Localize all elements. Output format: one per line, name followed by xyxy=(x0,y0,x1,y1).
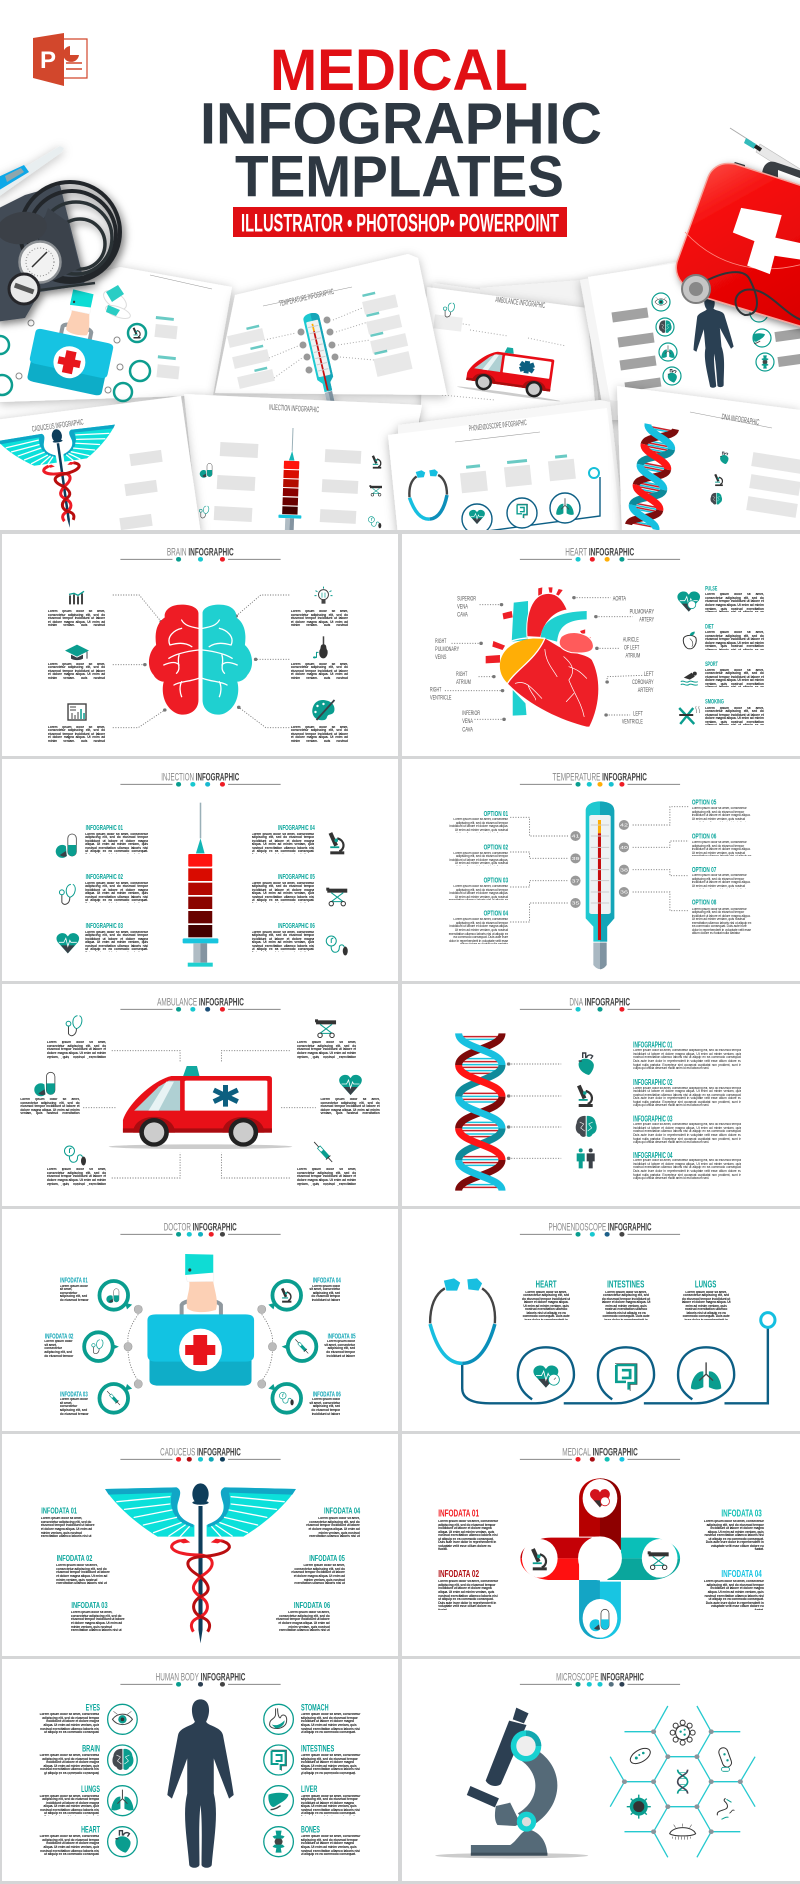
infographic headings xyxy=(85,824,314,930)
icon: stethoscope xyxy=(91,1340,103,1354)
organ headings: LIVER xyxy=(301,1784,317,1794)
temperature markers: 37 xyxy=(572,879,580,884)
icon: worms xyxy=(717,1798,734,1819)
heart labels: LEFT xyxy=(633,710,643,717)
sheet: ambulance infographic xyxy=(420,287,596,424)
icon: stretcher xyxy=(648,1551,669,1570)
heart labels: RIGHT xyxy=(430,686,441,693)
infodata headings: INFODATA 02 xyxy=(56,1554,92,1563)
section headings xyxy=(536,1278,717,1290)
heart labels: VENA xyxy=(462,718,473,725)
panel: microscope infographic xyxy=(402,1659,800,1881)
list headings: DIET xyxy=(705,623,714,630)
sheet: ambulance infographic: AMBULANCE INFOGRAPHIC xyxy=(495,295,546,310)
sheet: ambulance back pages xyxy=(430,280,600,420)
panel: brain infographic xyxy=(2,534,398,756)
sheet: injection infographic: INJECTION INFOGRAPHIC xyxy=(269,403,319,414)
icon: palette xyxy=(312,700,334,720)
temperature markers: 35 xyxy=(572,902,580,906)
infodata headings: INFODATA 02 xyxy=(44,1332,73,1340)
banner xyxy=(233,207,567,238)
section headings: HEART xyxy=(536,1278,557,1290)
icon: pill xyxy=(590,1609,609,1631)
panel: temperature infographic: OPTION 05 xyxy=(692,798,717,807)
icon: dark virus xyxy=(627,1795,651,1819)
temperature markers: 42 xyxy=(620,824,629,828)
icon: stomach xyxy=(269,1708,286,1729)
title: MEDICAL xyxy=(270,38,528,103)
organ headings xyxy=(81,1703,334,1835)
icon: PowerPoint logo: P xyxy=(40,47,56,74)
icon: heart pulse xyxy=(339,1075,361,1095)
option headings: OPTION 02 xyxy=(484,843,508,852)
sheet: injection infographic xyxy=(184,394,422,535)
icon: microscope xyxy=(280,1288,291,1303)
icon: heart organ xyxy=(115,1831,130,1853)
panel: heart infographic xyxy=(402,534,800,756)
dotted connectors xyxy=(83,1051,315,1178)
infodata headings: INFODATA 06 xyxy=(293,1601,330,1610)
icon: red first aid case xyxy=(676,162,800,335)
panel: temperature infographic: OPTION 08 xyxy=(692,898,717,907)
heading: caduceus xyxy=(120,1446,280,1462)
icon: heart with gauge xyxy=(590,1489,610,1507)
icon: liver xyxy=(268,1793,288,1810)
icon: digital thermometer xyxy=(0,146,64,200)
icon: heart pulse xyxy=(56,933,79,953)
icon: pulse heart xyxy=(677,592,700,612)
infodata headings: INFODATA 05 xyxy=(309,1554,344,1563)
panel: phonendoscope infographic xyxy=(402,1209,800,1431)
organ headings: HEART xyxy=(81,1825,99,1835)
option headings: OPTION 03 xyxy=(484,876,508,885)
heading: medical xyxy=(520,1446,680,1462)
heart labels: VENTRICLE xyxy=(622,718,643,725)
sheet: caduceus infographic xyxy=(0,396,201,536)
icon: apple xyxy=(683,632,696,649)
icon: bones xyxy=(272,1831,284,1853)
option headings: OPTION 01 xyxy=(484,810,508,818)
icon: small DNA xyxy=(678,1770,688,1794)
infodata headings: INFODATA 03 xyxy=(71,1601,107,1610)
heart labels: RIGHT xyxy=(456,671,467,678)
icon: brain xyxy=(576,1116,597,1137)
heading: DNA: DNA INFOGRAPHIC xyxy=(569,996,630,1009)
infodata headings: INFODATA 02 xyxy=(438,1568,479,1579)
panel: phonendoscope infographic: LUNGS xyxy=(695,1278,717,1290)
heart labels: RIGHT xyxy=(435,638,446,645)
temperature markers: 41 xyxy=(572,835,580,839)
temperature markers xyxy=(570,820,629,908)
icon: pill xyxy=(34,1072,54,1096)
heart labels: INFERIOR xyxy=(462,710,480,717)
heart labels: CAVA xyxy=(457,611,468,618)
heading: caduceus: CADUCEUS INFOGRAPHIC xyxy=(160,1446,240,1459)
heart labels: VENTRICLE xyxy=(430,694,452,701)
panel: human body infographic: INTESTINES xyxy=(301,1744,334,1754)
infodata headings: INFODATA 03 xyxy=(60,1390,87,1398)
infodata headings xyxy=(44,1276,355,1398)
temperature markers: 38 xyxy=(620,868,629,873)
organ headings: LUNGS xyxy=(81,1784,100,1794)
icon: heart with gauge xyxy=(533,1365,559,1388)
panel: doctor infographic xyxy=(2,1209,398,1431)
infodata headings: INFODATA 04 xyxy=(312,1276,340,1284)
caduceus illustration xyxy=(105,1483,295,1643)
icon: bacteria left xyxy=(628,1745,653,1767)
icon: no smoking xyxy=(679,706,700,724)
infodata headings: INFODATA 01 xyxy=(60,1276,87,1284)
stethoscope illustration xyxy=(430,1278,495,1363)
heading: temperature: TEMPERATURE INFOGRAPHIC xyxy=(553,771,647,784)
organ rings xyxy=(107,1704,293,1857)
panel: human body infographic xyxy=(2,1659,398,1881)
title: TEMPLATES xyxy=(235,144,564,210)
tube and rings xyxy=(462,1313,775,1403)
infographic headings: INFOGRAPHIC 01 xyxy=(85,824,122,832)
infodata headings: INFODATA 01 xyxy=(438,1507,479,1519)
icon: brain xyxy=(112,1749,133,1770)
panel: heart infographic: ARTERY xyxy=(638,687,654,694)
panel: injection infographic xyxy=(2,759,398,981)
panel: doctor infographic: INFODATA 05 xyxy=(327,1332,355,1340)
temperature markers: 39 xyxy=(572,857,580,862)
icon: caterpillar xyxy=(670,1824,696,1840)
panel: DNA infographic xyxy=(402,984,800,1206)
teal bubbles xyxy=(84,1281,316,1413)
infographic headings xyxy=(633,1041,673,1160)
list headings: SPORT xyxy=(705,661,718,668)
panel: heart infographic: ARTERY xyxy=(639,616,654,623)
heading: phonendoscope xyxy=(520,1221,680,1237)
heading: ambulance: AMBULANCE INFOGRAPHIC xyxy=(157,996,244,1009)
dotted connectors xyxy=(445,596,643,721)
heading: DNA xyxy=(520,996,680,1012)
section headings: INTESTINES xyxy=(607,1278,645,1290)
list headings: PULSE xyxy=(705,585,718,592)
heading: brain xyxy=(120,546,280,562)
icon: light bulb xyxy=(314,587,332,604)
heart labels: ATRIUM xyxy=(456,679,471,686)
sheet: DNA infographic xyxy=(617,386,800,535)
panel: heart infographic: CORONARY xyxy=(632,679,654,686)
icon: pill xyxy=(55,834,76,858)
panel: caduceus infographic xyxy=(2,1434,398,1656)
panel: injection infographic: INFOGRAPHIC 04 xyxy=(278,824,314,832)
panel: human body infographic: STOMACH xyxy=(301,1703,328,1713)
panel: ambulance infographic xyxy=(2,984,398,1206)
organ headings: BRAIN xyxy=(82,1744,99,1754)
heading: human body xyxy=(120,1671,280,1687)
thermometer illustration xyxy=(586,801,614,969)
heart labels: ATRIUM xyxy=(625,652,640,659)
dotted connectors xyxy=(510,807,689,922)
panel: DNA infographic: INFOGRAPHIC 04 xyxy=(633,1152,673,1160)
heading: human body: HUMAN BODY INFOGRAPHIC xyxy=(155,1671,245,1684)
heading: ambulance xyxy=(120,996,280,1012)
heading: heart xyxy=(520,546,680,562)
banner: ILLUSTRATOR • PHOTOSHOP• POWERPOINT xyxy=(241,210,559,238)
organ headings: BONES xyxy=(301,1825,320,1835)
panel: temperature infographic: OPTION 07 xyxy=(692,866,717,874)
heart illustration xyxy=(486,587,598,727)
temperature markers: 36 xyxy=(620,891,629,895)
heart labels: CAVA xyxy=(462,726,473,733)
ambulance illustration xyxy=(108,1066,292,1149)
icon: blood pressure xyxy=(64,1146,85,1166)
icon: microscope xyxy=(577,1085,593,1107)
temperature markers: 40 xyxy=(620,846,629,851)
icon: microscope xyxy=(531,1548,547,1570)
heart labels: OF LEFT xyxy=(624,644,639,651)
icon: clipboard chart xyxy=(68,704,86,720)
icon: swimmer xyxy=(681,672,698,685)
icon: stretcher xyxy=(326,888,347,906)
dashed arcs and nodes xyxy=(123,1305,276,1388)
sheet: human body infographic xyxy=(580,262,800,430)
infographic headings: INFOGRAPHIC 02 xyxy=(85,873,122,881)
icon: blood pressure xyxy=(326,936,347,956)
icon: syringe xyxy=(293,1338,309,1355)
sheet: doctor infographic xyxy=(0,267,232,402)
icon: bacteria right xyxy=(718,1746,733,1771)
organ headings: EYES xyxy=(85,1703,100,1713)
icon: heart organ xyxy=(579,1053,594,1075)
panel: injection infographic: INFOGRAPHIC 05 xyxy=(278,873,314,881)
microscope illustration xyxy=(435,1708,588,1858)
panel: DNA infographic: INFOGRAPHIC 02 xyxy=(633,1079,673,1087)
icon: syringe xyxy=(311,1140,334,1164)
icon: PowerPoint logo xyxy=(33,33,87,86)
heading: medical: MEDICAL INFOGRAPHIC xyxy=(562,1446,638,1459)
paper sheets collage xyxy=(0,254,800,536)
heading: doctor xyxy=(120,1221,280,1237)
panel: heart infographic: SMOKING xyxy=(705,698,724,705)
heart labels xyxy=(430,595,654,733)
heart labels: AURICLE xyxy=(623,636,639,643)
icon: stethoscope on case xyxy=(682,272,800,322)
infodata headings xyxy=(41,1507,360,1610)
heading: temperature xyxy=(520,771,680,787)
icon: syringe xyxy=(105,1390,121,1407)
hero section xyxy=(0,0,800,530)
title xyxy=(200,38,602,210)
heading: microscope: MICROSCOPE INFOGRAPHIC xyxy=(556,1671,644,1684)
icon: blood pressure xyxy=(279,1392,293,1405)
panel: temperature infographic: OPTION 06 xyxy=(692,832,717,841)
infodata headings: INFODATA 06 xyxy=(312,1390,340,1398)
brain illustration xyxy=(148,605,252,715)
icon: people xyxy=(577,1148,595,1168)
icon: microscope xyxy=(328,832,344,854)
icon: bar chart xyxy=(69,591,84,604)
icon: lungs xyxy=(691,1362,721,1389)
icon: graduation cap xyxy=(65,645,89,660)
dotted connectors xyxy=(112,595,289,728)
sheet: phonendoscope infographic: PHONENDOSCOPE INFOGRAPHIC xyxy=(468,418,527,433)
title: INFOGRAPHIC xyxy=(200,92,602,156)
heading: injection xyxy=(120,771,280,787)
icon: stethoscope xyxy=(59,884,75,904)
panel: medical infographic xyxy=(402,1434,800,1656)
icon: syringe xyxy=(730,128,800,180)
icon: lungs xyxy=(111,1790,133,1811)
doctor hand and medical case xyxy=(147,1254,254,1386)
heading: injection: INJECTION INFOGRAPHIC xyxy=(161,771,239,784)
infodata headings: INFODATA 01 xyxy=(41,1507,77,1516)
heart labels: AORTA xyxy=(613,595,626,602)
panel: DNA infographic: INFOGRAPHIC 03 xyxy=(633,1115,673,1124)
DNA helix xyxy=(459,1033,502,1191)
sheet: DNA infographic: DNA INFOGRAPHIC xyxy=(721,412,760,427)
heading: heart: HEART INFOGRAPHIC xyxy=(565,546,634,559)
panel: temperature infographic xyxy=(402,759,800,981)
icon: intestines xyxy=(270,1750,286,1771)
panel: injection infographic: INFOGRAPHIC 06 xyxy=(278,922,314,930)
panel: heart infographic: PULMONARY xyxy=(630,608,654,615)
option headings: OPTION 04 xyxy=(484,909,508,918)
icon: stretcher xyxy=(315,1019,336,1038)
option headings xyxy=(484,798,717,918)
infographic headings: INFOGRAPHIC 03 xyxy=(85,922,122,930)
icon: stethoscope xyxy=(66,1016,81,1036)
icon: virus flower xyxy=(670,1720,695,1745)
hexagon grid xyxy=(610,1706,755,1857)
heading: doctor: DOCTOR INFOGRAPHIC xyxy=(163,1221,236,1234)
medical cross illustration xyxy=(520,1478,680,1639)
dotted connectors xyxy=(507,1062,561,1160)
panel: DNA infographic: INFOGRAPHIC 01 xyxy=(633,1041,673,1050)
heading: brain: BRAIN INFOGRAPHIC xyxy=(166,546,233,559)
icon: pill xyxy=(106,1289,118,1303)
human silhouette xyxy=(167,1699,233,1868)
heading: phonendoscope: PHONENDOSCOPE INFOGRAPHIC xyxy=(548,1221,652,1234)
sheet: phonendoscope infographic xyxy=(388,400,625,535)
infodata headings xyxy=(438,1507,762,1579)
panel: heart infographic: LEFT xyxy=(644,671,654,678)
icon: blood pressure monitor xyxy=(0,182,120,322)
sheet: caduceus infographic: CADUCEUS INFOGRAPHIC xyxy=(31,417,84,434)
heading: microscope xyxy=(520,1671,680,1687)
heart labels: VENA xyxy=(457,603,468,610)
heart labels: SUPERIOR xyxy=(457,595,476,602)
sheet: temperature infographic xyxy=(215,254,447,408)
icon: guitar xyxy=(312,636,327,658)
list headings xyxy=(705,585,724,705)
sheet: temperature infographic: TEMPERATURE INFOGRAPHIC xyxy=(278,287,335,308)
heart labels: VEINS xyxy=(435,654,447,661)
heart labels: PULMONARY xyxy=(435,646,459,653)
syringe illustration xyxy=(182,803,218,967)
icon: eye xyxy=(112,1711,132,1725)
icon: intestines xyxy=(615,1364,637,1391)
